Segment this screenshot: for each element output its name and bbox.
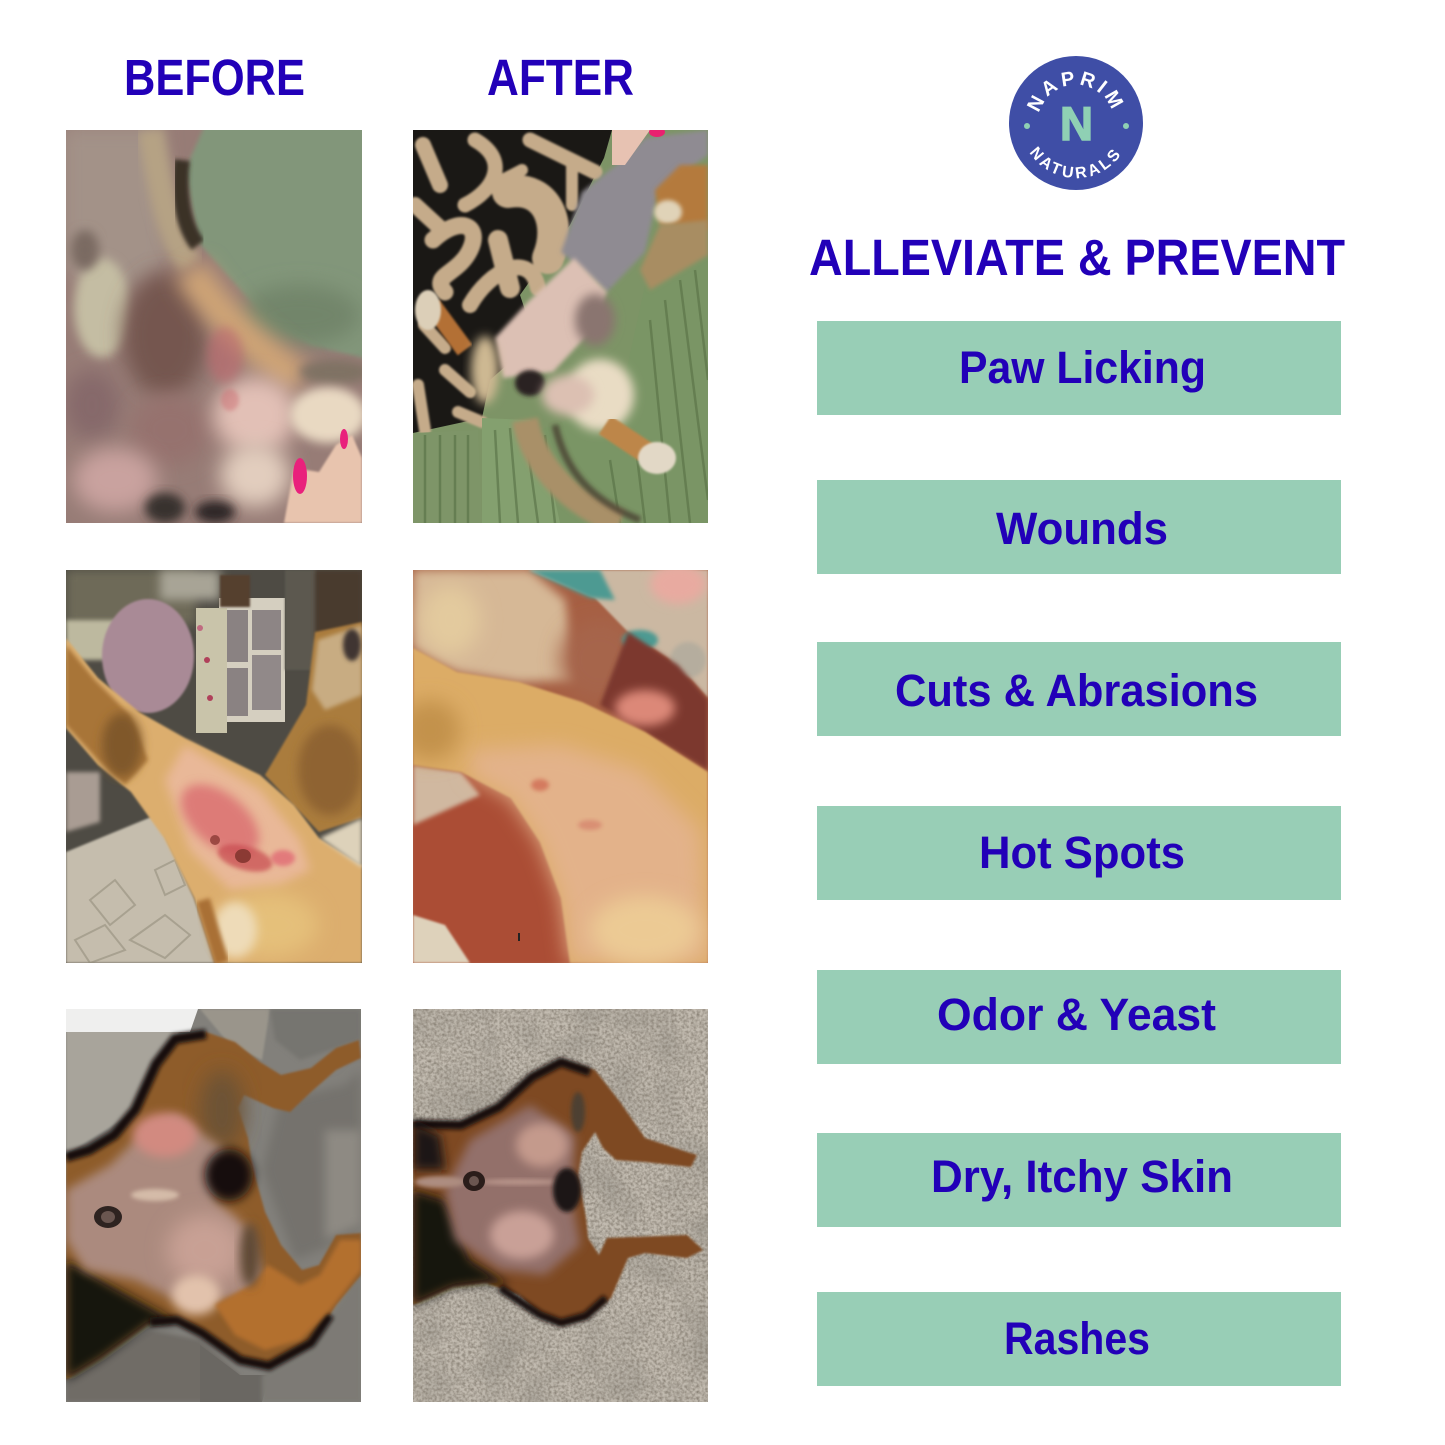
logo: Naprim Naturals badge: NAPRIM <box>1026 71 1124 112</box>
label bar: odor and yeast: Odor & Yeast <box>937 989 1216 1040</box>
label bar: cuts and abrasions: Cuts & Abrasions <box>895 665 1258 716</box>
label bar: hot spots: Hot Spots <box>979 827 1185 878</box>
label bar: rashes: Rashes <box>1004 1313 1150 1364</box>
logo: Naprim Naturals badge <box>1009 56 1143 190</box>
logo: Naprim Naturals badge: N <box>1060 97 1093 150</box>
label bar: paw licking <box>817 321 1341 415</box>
label bar: hot spots <box>817 806 1341 900</box>
heading: before: BEFORE <box>124 49 305 106</box>
label bar: odor and yeast <box>817 970 1341 1064</box>
label bar: wounds <box>817 480 1341 574</box>
logo: Naprim Naturals badge: NATURALS <box>1030 146 1120 178</box>
label bar: cuts and abrasions <box>817 642 1341 736</box>
photo: before, rottweiler belly on wood floor <box>66 1009 361 1402</box>
photo: after, rottweiler belly on carpet <box>413 1009 708 1402</box>
label bar: dry itchy skin: Dry, Itchy Skin <box>931 1151 1233 1202</box>
photo: after, dog leg with healed skin <box>400 564 708 964</box>
label bar: wounds: Wounds <box>996 503 1168 554</box>
label bar: dry itchy skin <box>817 1133 1341 1227</box>
title: alleviate and prevent: ALLEVIATE & PREVENT <box>809 229 1345 286</box>
label bar: rashes <box>817 1292 1341 1386</box>
photo: before, dog leg with red rash <box>66 570 362 963</box>
photo: before, dog belly with irritated skin <box>60 125 370 523</box>
heading: after: AFTER <box>487 49 634 106</box>
label bar: paw licking: Paw Licking <box>959 342 1206 393</box>
photo: after, small dog on green couch <box>413 127 708 523</box>
